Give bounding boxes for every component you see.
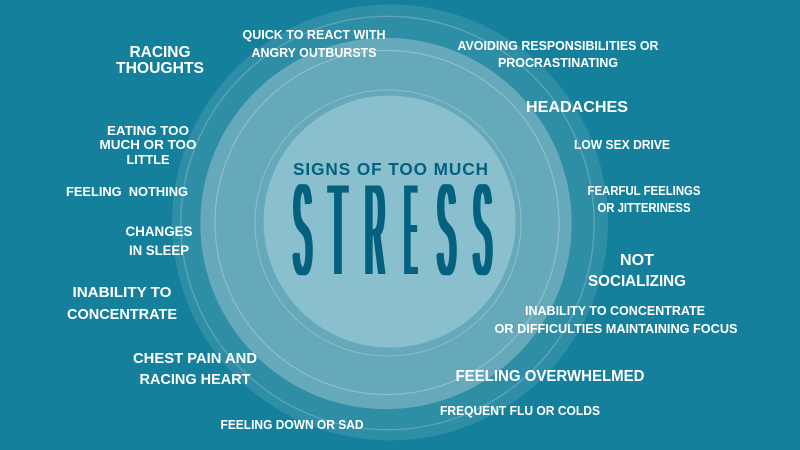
label: racing thoughts: THOUGHTS [116, 60, 204, 77]
label: inability to concentrate or difficulties: OR DIFFICULTIES MAINTAINING FOCUS [494, 321, 738, 336]
label: inability to concentrate: CONCENTRATE [67, 306, 177, 323]
label: feeling overwhelmed: FEELING OVERWHELMED [456, 368, 644, 385]
label: not socializing [588, 252, 686, 290]
label: not socializing: NOT [620, 252, 655, 269]
title: stress: S [293, 156, 312, 305]
label: frequent flu: FREQUENT FLU OR COLDS [440, 403, 600, 418]
title: stress: S [473, 156, 492, 305]
label: fearful feelings: OR JITTERINESS [598, 200, 691, 215]
label: fearful feelings [588, 183, 701, 215]
label: not socializing: SOCIALIZING [588, 273, 686, 290]
label: inability to concentrate or difficulties [494, 303, 738, 336]
title: stress: E [405, 156, 416, 305]
label: avoiding responsibilities: PROCRASTINATING [498, 55, 618, 70]
title: stress [293, 156, 492, 305]
label: eating too much: MUCH OR TOO [100, 137, 196, 152]
label: eating too much: LITTLE [126, 152, 170, 167]
title: stress: S [437, 156, 456, 305]
concentric circles [172, 4, 608, 440]
label: inability to concentrate: INABILITY TO [72, 284, 172, 301]
label: inability to concentrate [67, 284, 177, 323]
label: low sex drive: LOW SEX DRIVE [574, 137, 670, 152]
label: eating too much [100, 123, 196, 167]
label: quick to react: ANGRY OUTBURSTS [252, 45, 377, 60]
label: quick to react [242, 27, 386, 60]
label: changes in sleep: IN SLEEP [129, 243, 189, 258]
label: fearful feelings: FEARFUL FEELINGS [588, 183, 701, 198]
title: signs of too much: SIGNS OF TOO MUCH [293, 159, 488, 179]
label: chest pain: CHEST PAIN AND [133, 350, 257, 367]
label: quick to react: QUICK TO REACT WITH [242, 27, 386, 42]
label: racing thoughts [116, 44, 204, 77]
label: headaches: HEADACHES [526, 99, 628, 116]
label: chest pain [133, 350, 257, 388]
label: chest pain: RACING HEART [140, 371, 250, 388]
title: stress: R [366, 156, 385, 305]
label: inability to concentrate or difficulties: INABILITY TO CONCENTRATE [525, 303, 705, 318]
label: racing thoughts: RACING [130, 44, 190, 61]
label: eating too much: EATING TOO [107, 123, 189, 138]
label: avoiding responsibilities [458, 38, 659, 70]
title: stress: T [329, 157, 347, 304]
label: avoiding responsibilities: AVOIDING RESPONSIBILITIES OR [458, 38, 659, 53]
label: changes in sleep [126, 224, 192, 258]
label: feeling down: FEELING DOWN OR SAD [220, 417, 364, 432]
label: feeling nothing: FEELING NOTHING [66, 184, 188, 199]
label: changes in sleep: CHANGES [126, 224, 192, 239]
